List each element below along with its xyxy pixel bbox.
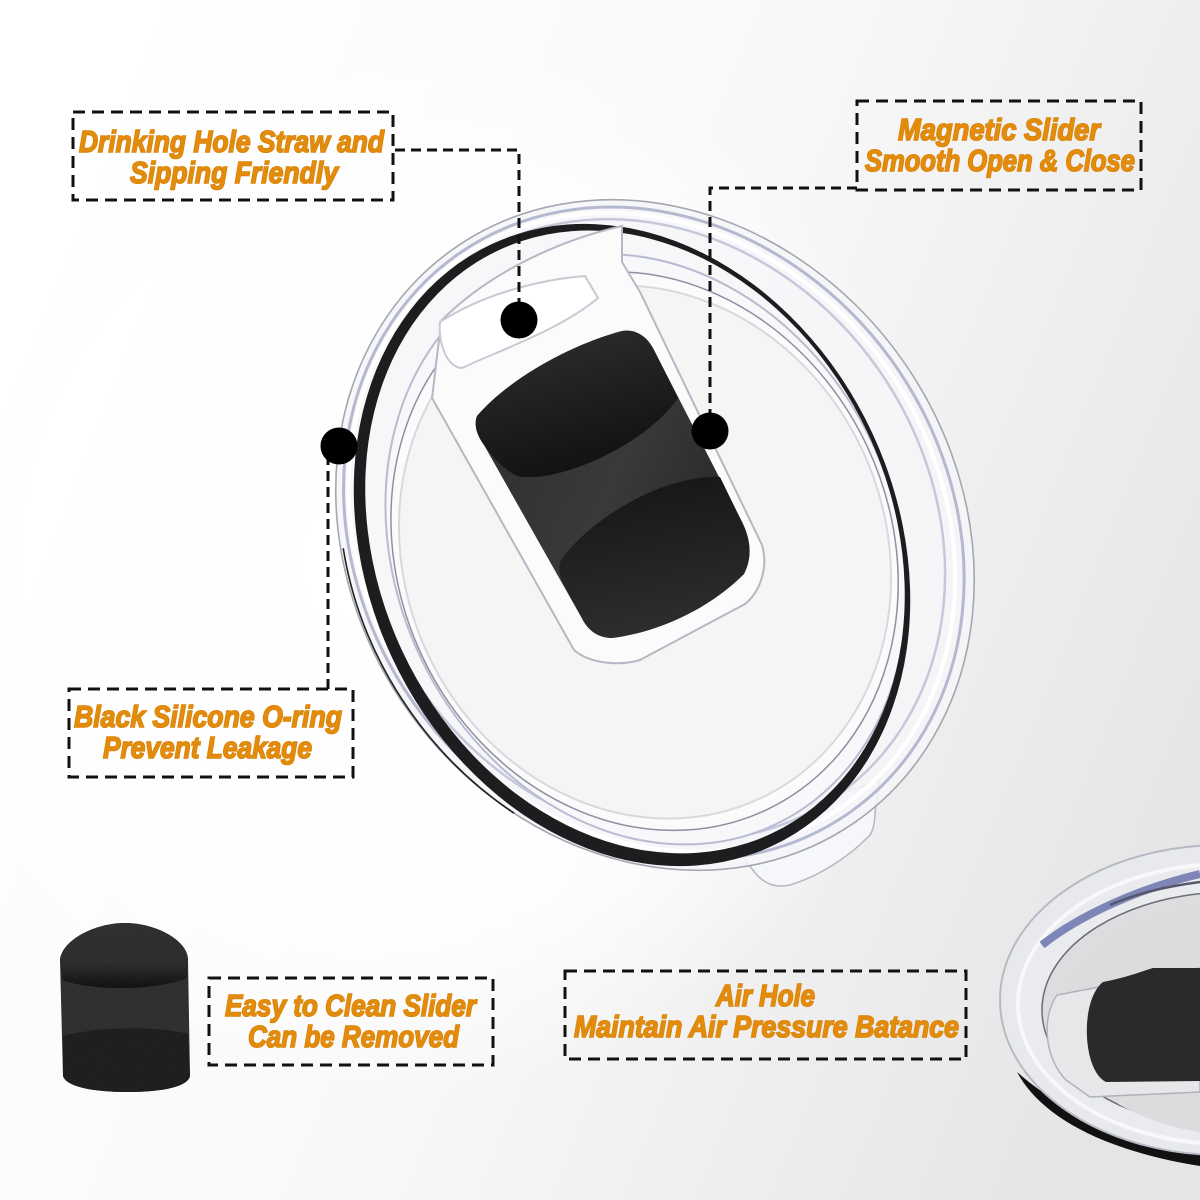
- leader line and marker: [320, 428, 358, 689]
- slider body: [476, 331, 750, 638]
- callout: silicone o-ring: [69, 428, 358, 777]
- lower grip: [63, 1028, 190, 1092]
- magnetic slider: [476, 331, 750, 638]
- second lid slider: [1087, 968, 1200, 1082]
- callout: magnetic slider: [692, 101, 1141, 450]
- label text: Prevent Leakage: [103, 730, 312, 765]
- label text: Maintain Air Pressure Batance: [574, 1009, 959, 1044]
- callout: drinking hole: [73, 112, 538, 338]
- label text: Can be Removed: [248, 1019, 460, 1054]
- straw drinking hole: [440, 276, 598, 368]
- label text: Black Silicone O-ring: [74, 699, 342, 734]
- label text: Sipping Friendly: [130, 155, 340, 190]
- second lid rim: [1000, 845, 1200, 1155]
- label text: Air Hole: [715, 978, 815, 1013]
- top grip: [60, 923, 188, 988]
- lid pull tab: [740, 780, 880, 886]
- callout: air hole: [565, 971, 966, 1059]
- label box: [857, 101, 1141, 190]
- leader line and marker: [692, 188, 857, 450]
- label box: [69, 689, 353, 777]
- surface grain: [60, 923, 190, 1092]
- lid outer rim: [206, 75, 1104, 995]
- inner rings: [291, 168, 1001, 931]
- second lid inner: [1062, 905, 1200, 1135]
- second lid slider track: [1047, 968, 1200, 1097]
- second lid corner: [1000, 845, 1200, 1166]
- slider track panel: [432, 226, 764, 663]
- label box: [73, 112, 393, 200]
- label text: Smooth Open & Close: [865, 143, 1135, 178]
- small removable slider: [60, 923, 190, 1092]
- blue highlight: [1042, 874, 1200, 945]
- label text: Magnetic Slider: [898, 112, 1102, 147]
- main lid: [206, 75, 1104, 995]
- second lid black seal: [1017, 1072, 1200, 1166]
- dark stripes: [1110, 882, 1200, 905]
- label text: Easy to Clean Slider: [225, 988, 478, 1023]
- slider body side view: [60, 923, 190, 1092]
- black silicone o-ring: [251, 132, 1013, 958]
- leader line and marker: [395, 150, 538, 338]
- label text: Drinking Hole Straw and: [79, 124, 385, 159]
- slider bottom grip: [559, 477, 750, 638]
- callout: easy to clean: [209, 978, 493, 1065]
- label box: [565, 971, 966, 1059]
- label box: [209, 978, 493, 1065]
- slider top grip: [476, 331, 678, 477]
